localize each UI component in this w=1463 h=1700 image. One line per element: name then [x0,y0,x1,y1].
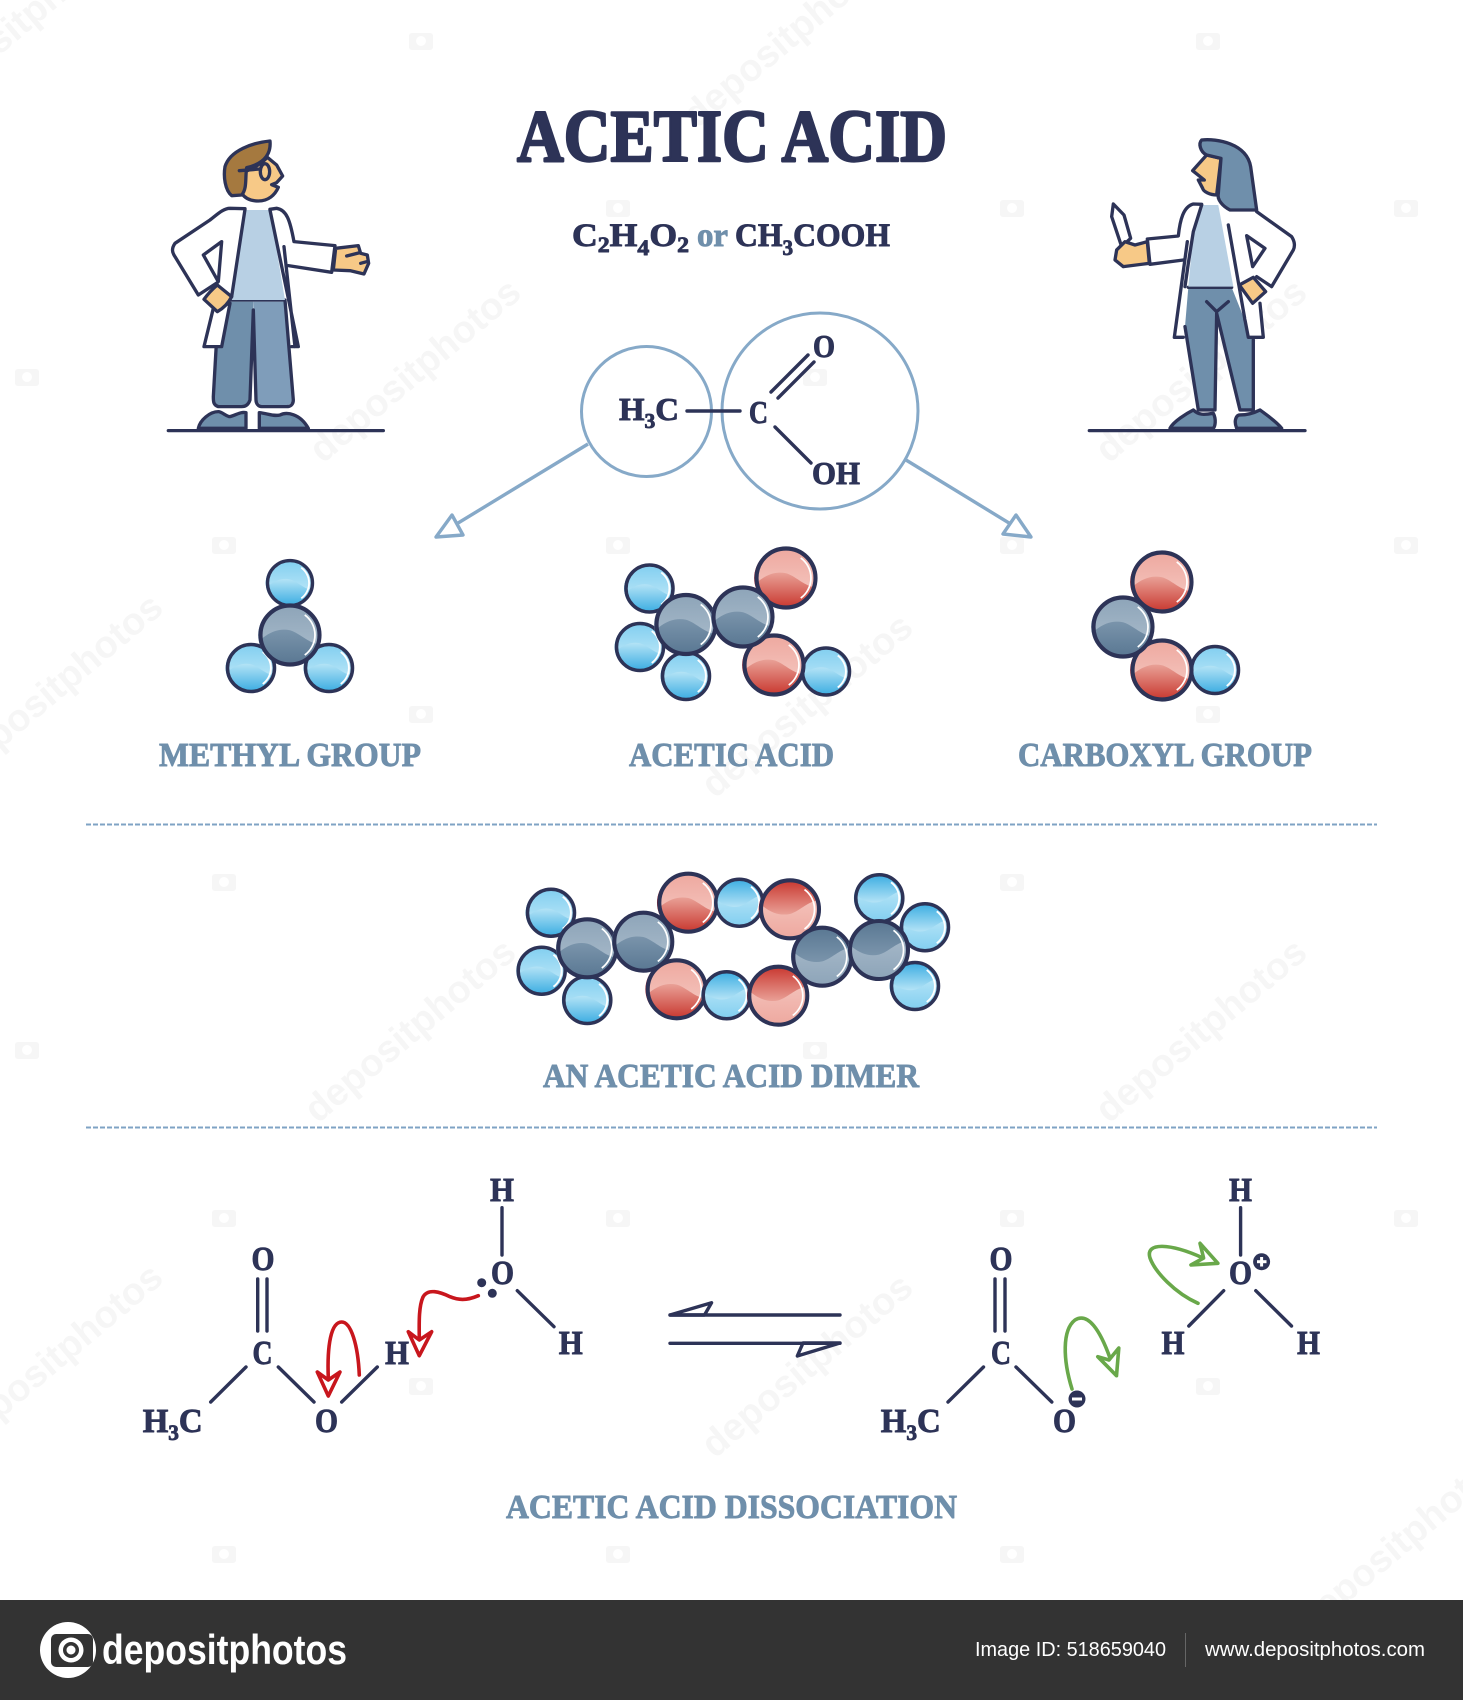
label: carboxyl group: CARBOXYL GROUP [1018,737,1312,774]
molecule: carboxyl group [1091,552,1238,700]
watermark pattern: depositphotos [694,1266,921,1466]
equilibrium arrows [670,1303,840,1356]
molecule: acetic acid dimer [516,874,948,1025]
atoms: O [491,1255,514,1292]
ground line [1089,426,1305,436]
atoms [881,1241,1076,1445]
molecule: methyl group [226,560,352,692]
scientist: woman [1089,140,1305,431]
image id: Image ID: 518659040 [975,1639,1166,1661]
formula line: CH [735,218,784,254]
footer bar [0,1600,1463,1700]
atoms: C [749,394,768,430]
formula line: H [610,218,638,254]
atoms: O [813,328,835,364]
atoms: H [143,1403,169,1440]
atoms [1162,1172,1320,1362]
structural formula with group circles [582,313,918,509]
products: acetate ion [881,1241,1086,1445]
trousers [212,300,293,407]
arrow to methyl group [436,444,588,537]
head [224,141,283,201]
label: dimer: AN ACETIC ACID DIMER [543,1058,919,1095]
atoms: OH [812,455,860,491]
ground line [168,426,383,436]
lone pair [478,1279,496,1297]
watermark pattern: depositphotos [302,271,529,471]
scientist: man [168,141,383,431]
bonds [948,1279,1052,1402]
trousers [1185,287,1253,410]
atoms [490,1172,583,1362]
atoms: H [385,1335,409,1372]
atoms: H [1229,1172,1252,1209]
atoms: H [490,1172,514,1209]
atoms: O [315,1403,338,1440]
label: dissociation: ACETIC ACID DISSOCIATION [506,1489,957,1526]
atoms: C [991,1335,1011,1372]
shoes [1170,410,1282,428]
formula line: or [697,218,728,254]
formula line: 2 [598,232,610,257]
label: acetic acid: ACETIC ACID [629,737,834,774]
atoms: 3 [168,1420,179,1445]
lab coat [172,208,335,347]
molecule: acetic acid [615,548,850,700]
formula line: 2 [677,232,689,257]
green electron arrow: hydronium [1149,1243,1218,1303]
circle: carboxyl [722,313,918,509]
bonds [687,355,814,463]
atoms: O [1229,1255,1252,1292]
bonds [502,1208,554,1327]
atoms: C [917,1403,941,1440]
watermark pattern: depositphotos [694,606,921,806]
atoms: C [655,391,679,427]
atoms: O [990,1241,1012,1278]
site url: www.depositphotos.com [1204,1639,1425,1661]
red electron arrow: lone pair to H [408,1292,478,1356]
atoms: 3 [645,409,655,433]
red electron arrow: O-H bond [317,1322,359,1396]
hand with pipette [1112,204,1266,303]
green electron arrow: acetate [1065,1318,1119,1389]
watermark pattern: depositphotos [297,931,524,1131]
formula line [572,218,890,260]
reactants: water [478,1172,583,1362]
products: hydronium ion [1162,1172,1320,1362]
reactants: acetic acid [143,1241,409,1445]
logo wordmark: depositphotos [102,1626,347,1673]
hands [204,246,369,312]
atoms: O [252,1241,274,1278]
atoms: H [881,1403,907,1440]
negative charge [1068,1390,1086,1408]
circle: methyl [582,346,712,476]
bonds [1189,1208,1292,1326]
shirt [1188,205,1233,287]
atoms: H [1162,1325,1184,1362]
formula line: 4 [637,235,649,260]
atoms [143,1241,409,1445]
formula line: C [572,218,596,254]
atoms: H [559,1325,583,1362]
watermark pattern: depositphotos [1088,271,1315,471]
formula line: O [649,218,677,254]
atoms: O [1053,1403,1076,1440]
watermark pattern: depositphotos [1088,931,1315,1131]
lab coat [1147,204,1294,337]
label: methyl group: METHYL GROUP [159,737,421,774]
shoes [198,412,308,428]
bonds [211,1279,377,1402]
atoms: C [252,1335,272,1372]
formula line: COOH [793,218,890,254]
arrow to carboxyl group [906,460,1031,537]
atoms: C [179,1403,203,1440]
head and hair [1193,140,1257,210]
atoms: 3 [906,1420,917,1445]
positive charge [1253,1253,1270,1270]
shirt [232,210,285,300]
title: ACETIC ACID [517,96,947,178]
atoms: H [1297,1325,1320,1362]
atoms: H [619,391,644,427]
atoms [619,328,860,491]
formula line: 3 [783,235,793,260]
logo icon [40,1622,96,1678]
